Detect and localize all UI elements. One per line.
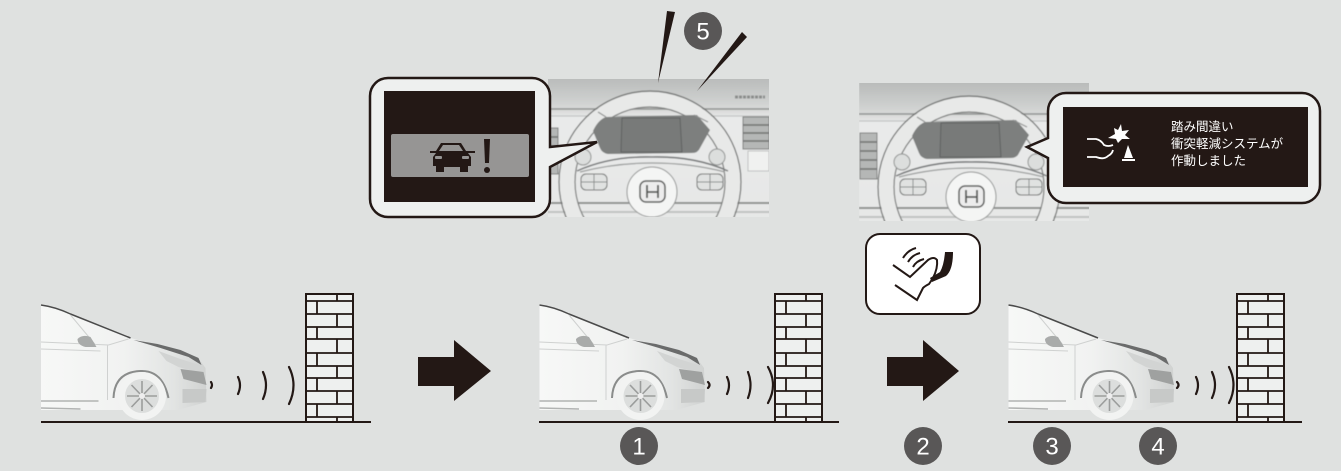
scene 1: car approaching wall: [41, 294, 371, 423]
dashboard left: [548, 79, 769, 217]
badge 1: [620, 427, 658, 465]
text: alert message: 作動しました: [1171, 154, 1246, 168]
sensor waves 2: [708, 367, 773, 403]
badge 3: 3: [1045, 434, 1059, 460]
sensor waves 3: [1177, 367, 1234, 403]
text: alert message: 踏み間違い: [1171, 120, 1234, 134]
ground line 2: [539, 421, 839, 423]
badge 2: [904, 427, 942, 465]
callout: forward warning: [370, 78, 597, 217]
badge 4: 4: [1151, 434, 1165, 460]
arrow 1: [418, 340, 491, 401]
brick wall 1: [306, 294, 353, 422]
callout: mitigation message: [1027, 93, 1320, 203]
scene 2: warning stage: [539, 294, 839, 423]
arrow 2: [887, 340, 959, 401]
ground line 1: [41, 421, 371, 423]
ground line 3: [1008, 421, 1302, 423]
badge 3: [1033, 427, 1071, 465]
icon: car front: [430, 143, 475, 172]
sensor waves 1: [211, 367, 294, 404]
badge 1: 1: [632, 434, 646, 460]
text: alert message: 衝突軽減システムが: [1171, 136, 1284, 151]
scene 3: mitigation stage: [1008, 294, 1302, 423]
badge 4: [1139, 427, 1177, 465]
icon: exclamation: [484, 139, 490, 173]
brick wall 2: [775, 294, 822, 422]
brick wall 3: [1237, 294, 1284, 422]
badge 2: 2: [916, 434, 930, 460]
icon: pedal misapplication: [1087, 124, 1135, 161]
dashboard right: [859, 83, 1089, 221]
badge 5: [684, 12, 722, 50]
alert spikes: [658, 11, 747, 91]
badge 5: 5: [696, 18, 710, 46]
icon: accelerator pedal box: [866, 234, 980, 314]
